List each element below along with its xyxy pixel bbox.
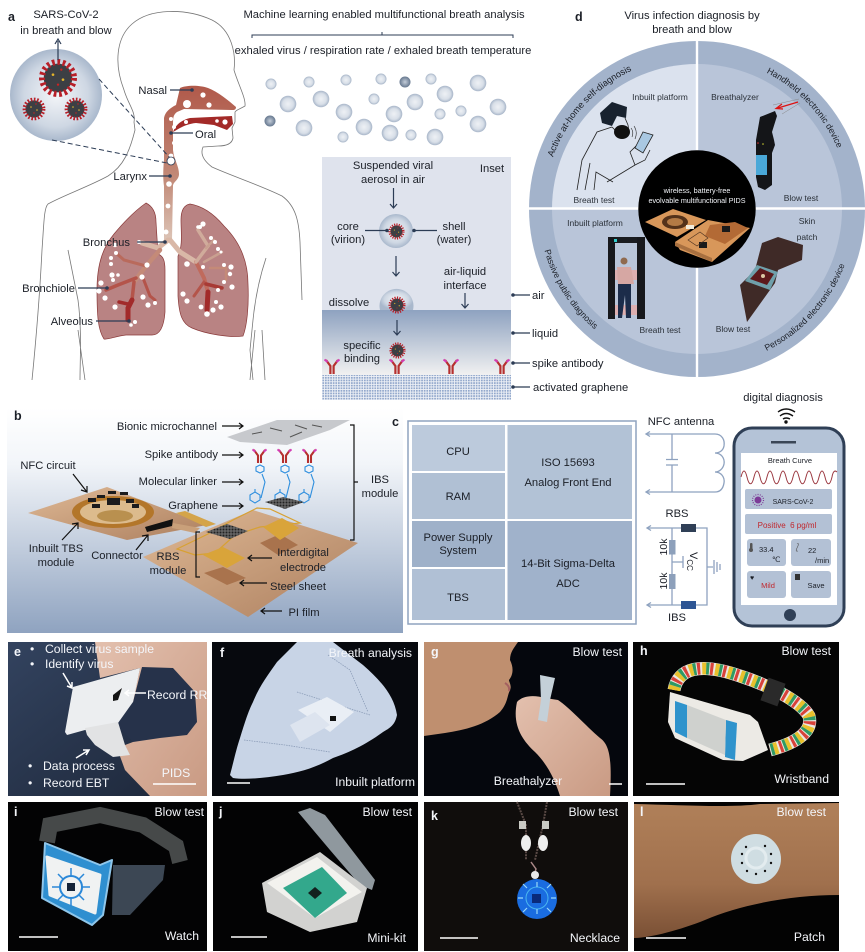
steel sheets — [204, 534, 298, 585]
photo f: mask: Inbuilt platform — [335, 775, 415, 789]
quadrant labels: Inbuilt platform — [567, 218, 623, 228]
photo i: watch: i — [14, 805, 17, 819]
photo i: watch — [8, 802, 207, 951]
photo g: blowing on breathalyzer: Blow test — [573, 645, 623, 659]
left PI board with NFC circuit — [28, 487, 207, 540]
antibodies — [324, 360, 510, 374]
photo f: mask — [212, 642, 418, 796]
block CPU: CPU — [446, 446, 470, 458]
sensor readout circuit — [647, 508, 720, 624]
inset text block: core — [337, 221, 359, 233]
smartphone — [734, 428, 844, 626]
quadrant labels: Skin — [799, 216, 816, 226]
bullets: PIDS — [162, 766, 190, 780]
photo k: necklace: Blow test — [569, 805, 619, 819]
zoom origin circle — [167, 157, 175, 165]
quadrant labels: patch — [797, 232, 818, 242]
photo l: patch on arm: l — [640, 805, 643, 819]
inset text block: aerosol in air — [361, 174, 425, 186]
inset text block: specific — [343, 340, 381, 352]
layer labels: liquid — [532, 328, 558, 340]
panel b labels: module — [38, 557, 74, 569]
temperature tile: ℃ — [772, 555, 781, 564]
curved ring labels: Active at-home self-diagnosis — [548, 66, 632, 158]
panel b arrows — [62, 423, 282, 614]
icon: breathalyzer — [756, 99, 800, 190]
heading in breath and blow: in breath and blow — [20, 25, 113, 37]
panel b labels: module — [150, 565, 186, 577]
sensor readout circuit: 10k — [658, 538, 670, 555]
bullets — [28, 642, 207, 790]
photo i: watch: Blow test — [155, 805, 205, 819]
photo f: mask: Breath analysis — [329, 646, 412, 660]
quadrant labels: Breathalyzer — [711, 92, 759, 102]
block ISO 15693: Analog Front End — [524, 477, 612, 489]
panel b labels: Bionic microchannel — [117, 421, 217, 433]
inset text block: (water) — [437, 234, 472, 246]
label Alveolus: Alveolus — [51, 316, 93, 328]
block ADC: 14-Bit Sigma-Delta — [521, 558, 616, 570]
panel b labels: Interdigital — [277, 547, 329, 559]
outer ring — [529, 41, 865, 377]
icon: man with phone — [577, 102, 653, 190]
photo k: necklace: k — [431, 809, 438, 823]
severity tile: ♥ — [750, 575, 754, 582]
panel b labels: Connector — [91, 550, 143, 562]
inset text block: dissolve — [329, 297, 369, 309]
center PIDS circle: wireless, battery-free — [663, 186, 730, 195]
NFC antenna circuit — [646, 416, 724, 494]
panel: machine learning breath analysis header — [235, 9, 531, 145]
panel b labels: Molecular linker — [139, 476, 217, 488]
interdigital electrodes — [203, 518, 299, 568]
photo f: mask: f — [220, 646, 225, 660]
label Bronchus — [83, 237, 167, 249]
block CPU — [412, 425, 505, 471]
inset text block: shell — [442, 221, 466, 233]
photo h: wristband: h — [640, 644, 648, 658]
SARS-CoV-2 result: SARS-CoV-2 — [773, 499, 814, 506]
bullets: Collect virus sample — [45, 642, 154, 656]
bound virus — [391, 344, 404, 357]
bracket — [252, 32, 513, 38]
block ADC — [508, 521, 632, 620]
block TBS — [412, 569, 505, 620]
bullets: Data process — [43, 759, 115, 773]
bionic microchannel — [227, 420, 350, 445]
sensor readout circuit: CC — [685, 559, 694, 571]
label Bronchiole — [22, 283, 109, 295]
sensor readout circuit: IBS — [668, 612, 686, 624]
respiration rate tile — [791, 539, 831, 566]
photo i: watch: Watch — [165, 929, 199, 943]
panel b labels: Steel sheet — [270, 581, 327, 593]
save tile: Save — [807, 581, 825, 590]
breath curve — [741, 456, 837, 484]
panel d title — [624, 10, 760, 36]
label Oral: Oral — [195, 129, 216, 141]
panel d: virus infection diagnosis wheel — [529, 10, 865, 377]
layer labels — [511, 290, 628, 394]
panel b labels: electrode — [280, 562, 326, 574]
panel label b: b — [14, 409, 22, 423]
photo e: PIDS in hand: e — [14, 645, 21, 659]
center PIDS circle — [638, 150, 756, 268]
quadrant labels: Inbuilt platform — [632, 92, 688, 102]
sensor readout circuit: V — [687, 552, 699, 559]
body outline — [32, 11, 302, 380]
right PI board — [143, 508, 358, 617]
IBS bracket — [350, 425, 358, 540]
arrow up to label — [55, 39, 61, 60]
exhaled bubbles — [264, 74, 506, 145]
label Oral — [169, 129, 216, 141]
panel b labels: Inbuilt TBS — [29, 543, 83, 555]
NFC antenna circuit: NFC antenna — [648, 416, 715, 428]
graphene on film — [206, 524, 248, 539]
bullets: • — [28, 759, 32, 773]
panel label a: a — [8, 10, 16, 24]
block RAM — [412, 473, 505, 519]
breath curve: Breath Curve — [768, 456, 812, 465]
panel label c: c — [392, 415, 399, 429]
severity tile — [747, 571, 786, 598]
quadrant labels — [567, 92, 819, 335]
connector — [145, 511, 216, 533]
inset text block: Suspended viral — [353, 160, 433, 172]
panel b: exploded device — [7, 408, 403, 633]
block TBS: TBS — [447, 592, 469, 604]
icon: security gate with person — [608, 237, 645, 319]
center PIDS circle: evolvable multifunctional PIDS — [648, 196, 746, 205]
inset text block: interface — [444, 280, 486, 292]
quadrant labels: Blow test — [716, 324, 751, 334]
lungs — [97, 203, 248, 339]
top graphene — [265, 497, 304, 509]
panel d title: Virus infection diagnosis by — [624, 10, 760, 22]
curved ring labels — [544, 66, 844, 351]
label Alveolus — [51, 316, 131, 328]
photo l: patch on arm: Patch — [794, 930, 825, 944]
heading SARS-CoV-2: SARS-CoV-2 — [33, 9, 99, 21]
label Bronchus: Bronchus — [83, 237, 130, 249]
bullets: • — [28, 776, 32, 790]
SARS-CoV-2 result — [745, 489, 832, 509]
liquid layer — [322, 310, 511, 375]
block RAM: RAM — [446, 491, 470, 503]
bullets: Identify virus — [45, 657, 113, 671]
respiration rate tile: 22 — [808, 546, 816, 555]
panel b labels: Graphene — [168, 500, 218, 512]
panel b labels: module — [362, 488, 398, 500]
block ADC: ADC — [556, 578, 580, 590]
sensor readout circuit: 10k — [658, 572, 670, 589]
photo h: wristband: Blow test — [782, 644, 832, 658]
panel d title: breath and blow — [652, 24, 733, 36]
panel label d: d — [575, 10, 583, 24]
aerosol droplet — [379, 214, 413, 248]
photo k: necklace: Necklace — [570, 931, 620, 945]
heading machine learning: Machine learning enabled multifunctional breath analysis — [243, 9, 525, 21]
label Larynx: Larynx — [113, 171, 147, 183]
layer labels: air — [532, 290, 545, 302]
photo j: mini-kit — [213, 802, 418, 951]
quadrant labels: Breath test — [639, 325, 681, 335]
severity tile: Mild — [761, 581, 775, 590]
block ISO 15693: ISO 15693 — [541, 457, 595, 469]
air layer — [322, 157, 511, 310]
photo e: PIDS in hand — [8, 642, 207, 796]
frame — [408, 421, 636, 624]
molecular linkers — [250, 465, 314, 503]
quadrant labels: Breath test — [573, 195, 615, 205]
photo j: mini-kit: j — [218, 805, 222, 819]
photo k: necklace — [424, 802, 628, 951]
label Larynx — [113, 171, 172, 183]
layer labels: spike antibody — [532, 358, 604, 370]
block power supply: System — [439, 545, 477, 557]
photo g: blowing on breathalyzer: Breathalyzer — [494, 774, 562, 788]
photo j: mini-kit: Mini-kit — [367, 931, 407, 945]
sensor readout circuit: RBS — [665, 508, 689, 520]
panel a: respiratory tract — [8, 9, 302, 380]
icon: wifi — [778, 409, 795, 423]
panel b labels: IBS — [371, 474, 389, 486]
bullets: Record EBT — [43, 776, 110, 790]
inset text block: (virion) — [331, 234, 365, 246]
photo j: mini-kit: Blow test — [363, 805, 413, 819]
dashed zoom lines — [52, 79, 170, 163]
bronchial tree — [106, 230, 226, 320]
panel b background — [7, 408, 403, 633]
inset text block: Inset — [480, 163, 505, 175]
label Nasal: Nasal — [138, 85, 167, 97]
bullets: • — [30, 642, 34, 656]
quadrant labels: Blow test — [784, 193, 819, 203]
inner quadrants — [552, 64, 842, 354]
inset text block: air-liquid — [444, 266, 486, 278]
panel b labels: RBS — [156, 551, 180, 563]
panel c: system block diagram — [392, 392, 844, 626]
magnified virus sphere — [10, 49, 102, 141]
block power supply: Power Supply — [423, 532, 493, 544]
temperature tile: 33.4 — [759, 545, 774, 554]
photo g: blowing on breathalyzer — [424, 642, 628, 796]
curved ring labels: Personalized electronic device — [764, 264, 844, 351]
icon: wrist with patch — [740, 237, 803, 322]
spike antibodies — [252, 449, 317, 463]
panel b labels: NFC circuit — [20, 460, 77, 472]
panel: inset air-liquid interface — [322, 157, 628, 400]
dissolving droplet — [379, 289, 414, 312]
respiration rate tile: /min — [815, 556, 829, 565]
core and shell leaders — [365, 229, 437, 232]
photo l: patch on arm: Blow test — [777, 805, 827, 819]
digital diagnosis label: digital diagnosis — [743, 392, 823, 404]
panel b labels: PI film — [288, 607, 320, 619]
photo h: wristband: Wristband — [774, 772, 829, 786]
panel b labels — [20, 421, 398, 619]
positive result: Positive 6 pg/ml — [758, 521, 817, 530]
photo l: patch on arm — [634, 802, 839, 951]
curved ring labels: Passive public diagnosis — [544, 249, 597, 329]
block power supply — [412, 521, 505, 567]
positive result — [745, 514, 832, 534]
block ISO 15693 — [508, 425, 632, 519]
inset text block — [329, 160, 505, 365]
trachea and nasal airway — [163, 86, 236, 240]
label Bronchiole: Bronchiole — [22, 283, 75, 295]
white aerosol dots — [96, 92, 235, 327]
bullets: • — [30, 657, 34, 671]
curved ring labels: Handheld electronic device — [767, 68, 841, 148]
bullets: Record RR — [147, 688, 207, 702]
panel b labels: Spike antibody — [145, 449, 218, 461]
photo h: wristband — [633, 642, 839, 796]
label Nasal — [138, 85, 194, 97]
inset arrows — [390, 188, 468, 335]
layer labels: activated graphene — [533, 382, 628, 394]
subtitle: exhaled virus / respiration rate / exhaled breath temperature — [235, 45, 531, 57]
RBS bracket — [196, 532, 200, 577]
temperature tile — [747, 539, 786, 566]
photo g: blowing on breathalyzer: g — [431, 645, 439, 659]
inset text block: binding — [344, 353, 380, 365]
save tile — [791, 571, 831, 598]
activated graphene layer — [322, 375, 511, 400]
